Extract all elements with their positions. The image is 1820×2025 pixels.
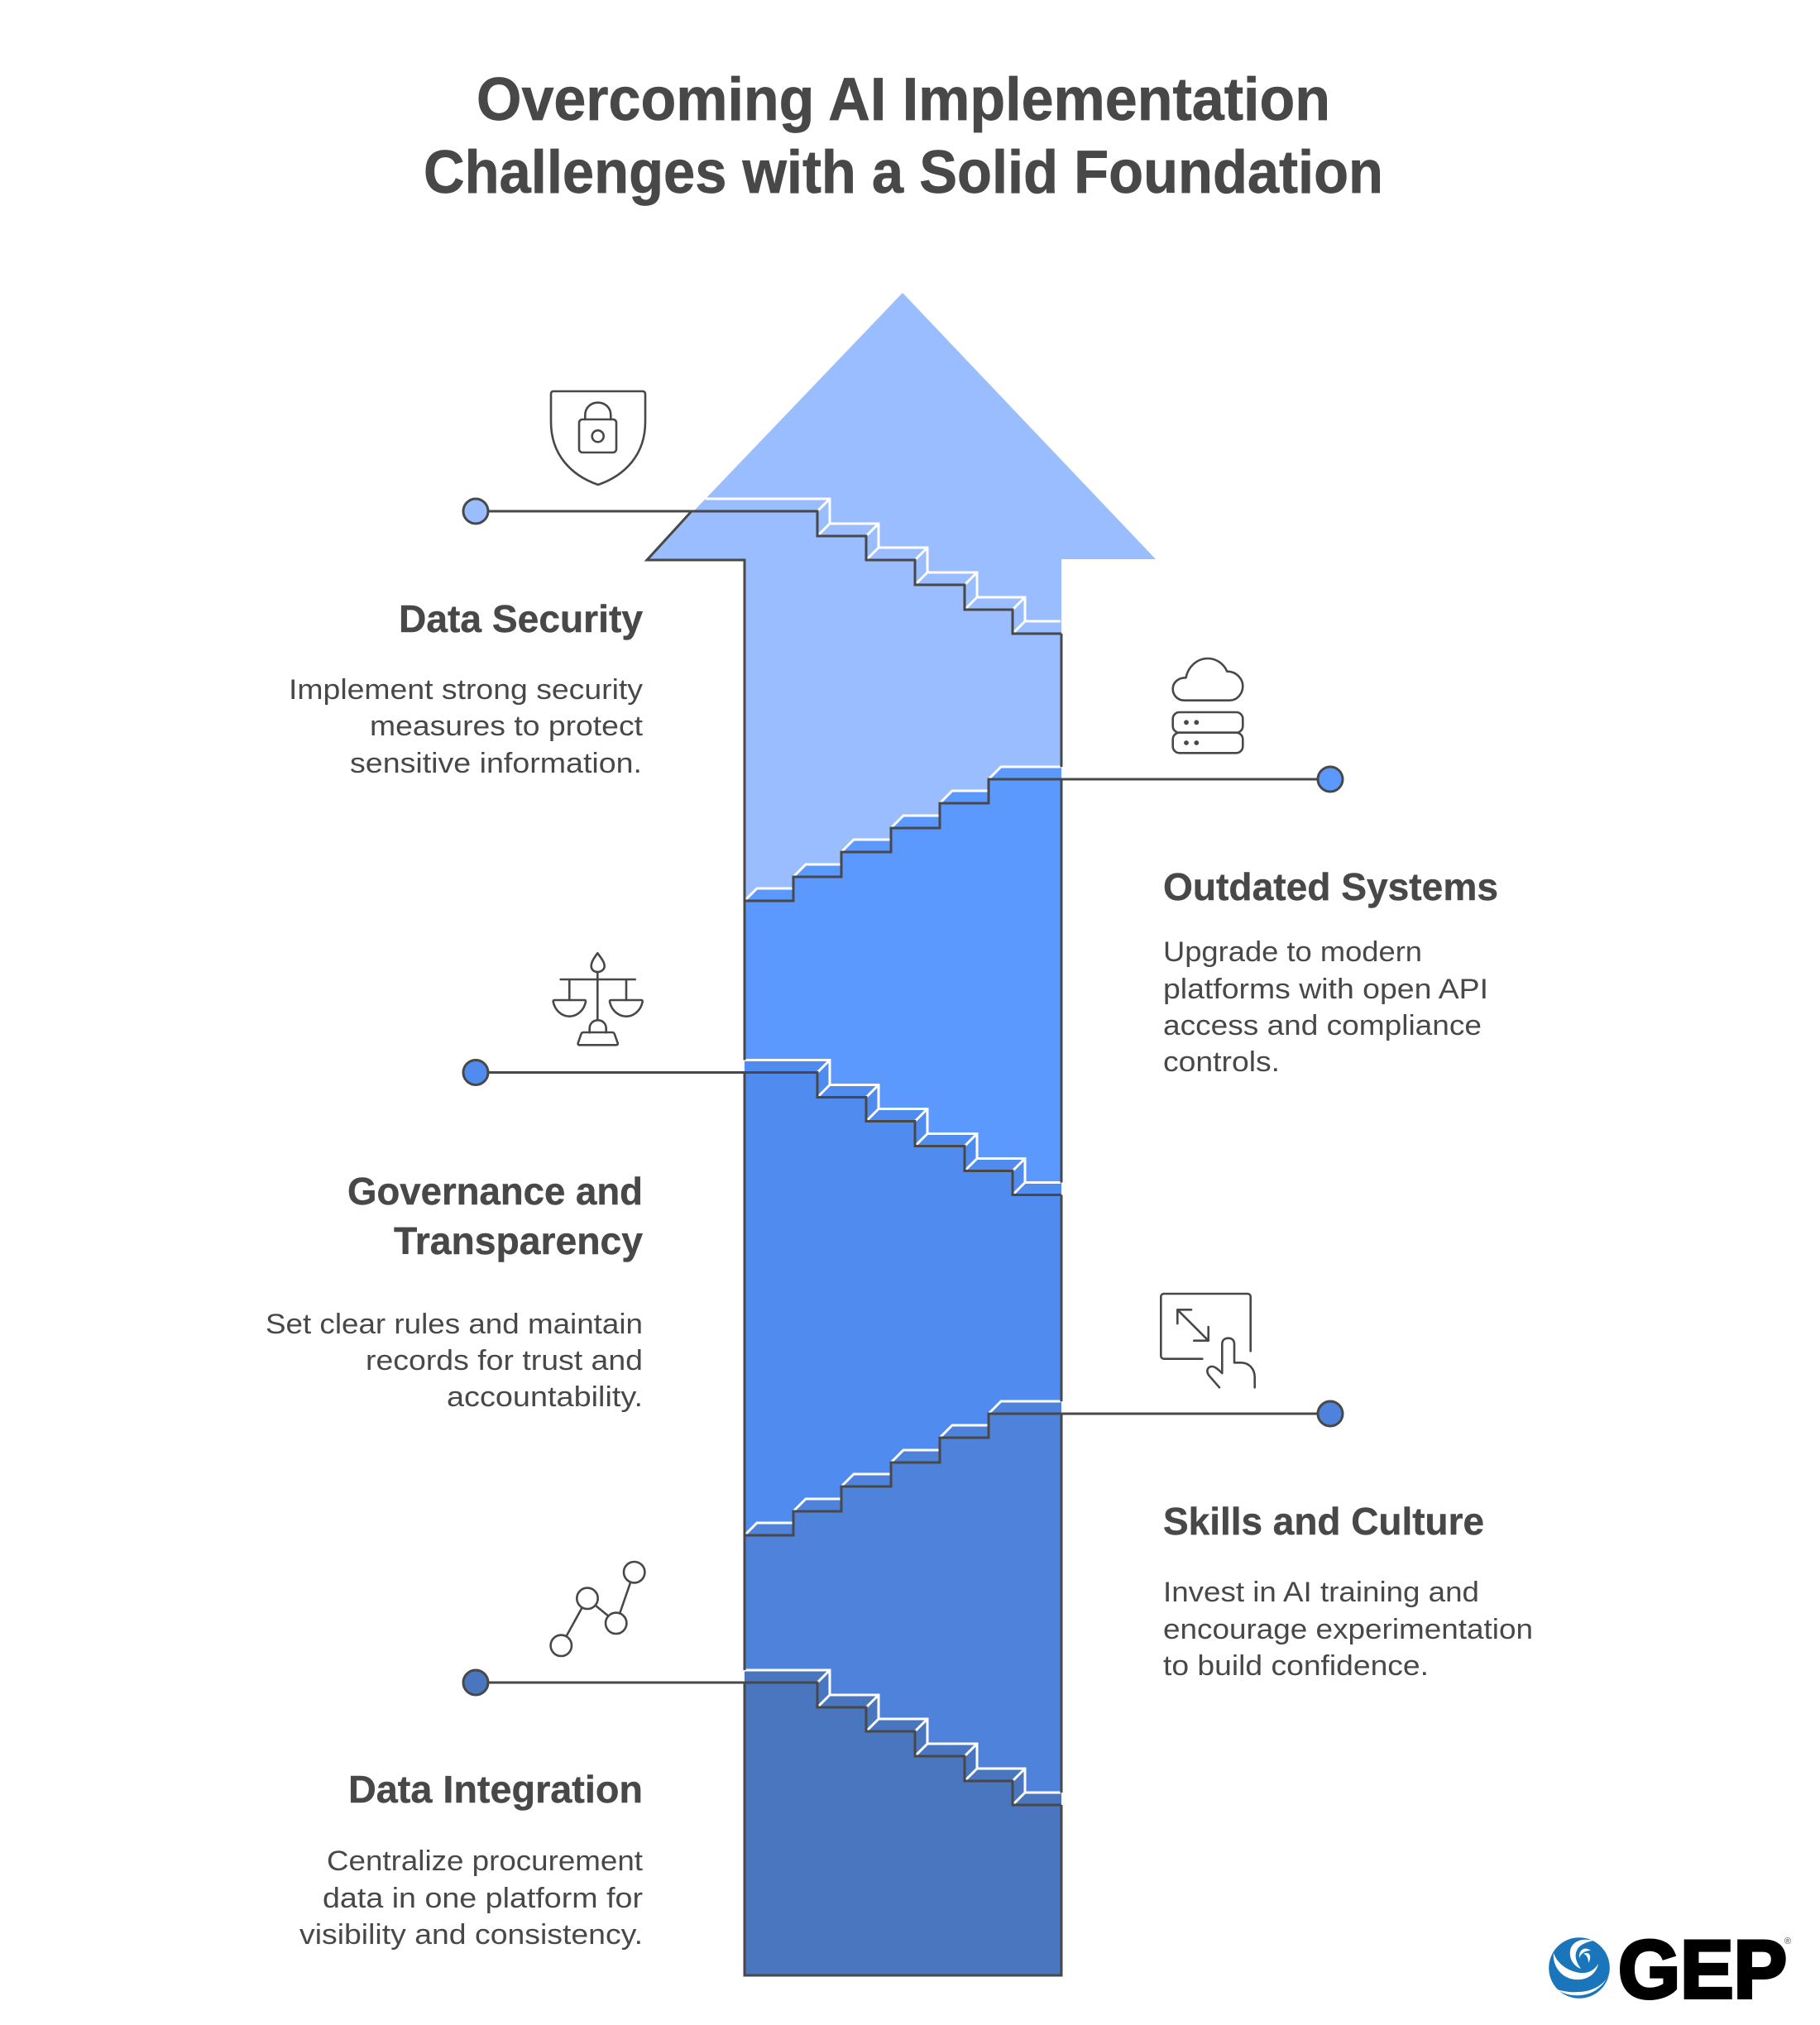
text block: data security: Data Security [399,597,643,640]
title [424,66,1383,206]
text block: skills and culture [1163,1500,1533,1682]
text block: data integration: Centralize procurement [327,1845,644,1877]
text block: data integration: visibility and consistency. [299,1919,643,1951]
text block: governance and transparency: Governance and [347,1170,643,1213]
connector: data integration [463,1670,745,1695]
logo: GEP: GEP [1618,1923,1787,2015]
text block: data integration: Data Integration [348,1768,643,1811]
text block: data integration [299,1768,644,1951]
icon: balance scale [553,953,643,1045]
icon: shield with padlock [551,391,645,485]
icon: resize with touch gesture [1161,1294,1255,1387]
text block: data security [289,597,644,779]
text block: outdated systems: Upgrade to modern [1163,936,1422,968]
icon: connected data nodes [551,1562,644,1656]
text block: outdated systems: access and compliance [1163,1010,1482,1041]
text block: governance and transparency: Set clear rules and maintain [266,1309,643,1340]
text block: outdated systems [1163,865,1498,1078]
text block: governance and transparency [266,1170,643,1413]
connector: governance and transparency [463,1060,745,1085]
arrow band: skills and culture [745,1401,1061,1975]
arrow band: governance and transparency [745,1060,1061,1975]
connector: data security [463,499,692,524]
arrow band: data integration [745,1670,1061,1975]
connector: skills and culture [1061,1401,1343,1426]
text block: skills and culture: to build confidence. [1163,1650,1429,1682]
arrow band: data security [647,293,1156,1975]
text block: data security: measures to protect [370,711,644,742]
text block: skills and culture: encourage experimentation [1163,1614,1533,1645]
text block: skills and culture: Skills and Culture [1163,1500,1484,1543]
title: Overcoming AI Implementation [477,66,1330,133]
text block: outdated systems: controls. [1163,1046,1280,1078]
text block: data security: sensitive information. [350,748,642,779]
text block: data security: Implement strong security [289,674,643,706]
text block: governance and transparency: accountability. [447,1381,643,1413]
arrow band: outdated systems [745,767,1061,1975]
text block: governance and transparency: records for trust and [366,1345,643,1376]
text block: skills and culture: Invest in AI training and [1163,1577,1479,1608]
staircase arrow [647,293,1156,1975]
text block: governance and transparency: Transparency [394,1219,643,1262]
title: Challenges with a Solid Foundation [424,139,1383,206]
icon: cloud and servers [1173,658,1243,753]
connector: outdated systems [1061,767,1343,792]
text block: outdated systems: platforms with open API [1163,974,1488,1005]
text block: outdated systems: Outdated Systems [1163,865,1498,908]
text block: data integration: data in one platform for [323,1883,643,1914]
logo: GEP: ® [1784,1936,1791,1946]
